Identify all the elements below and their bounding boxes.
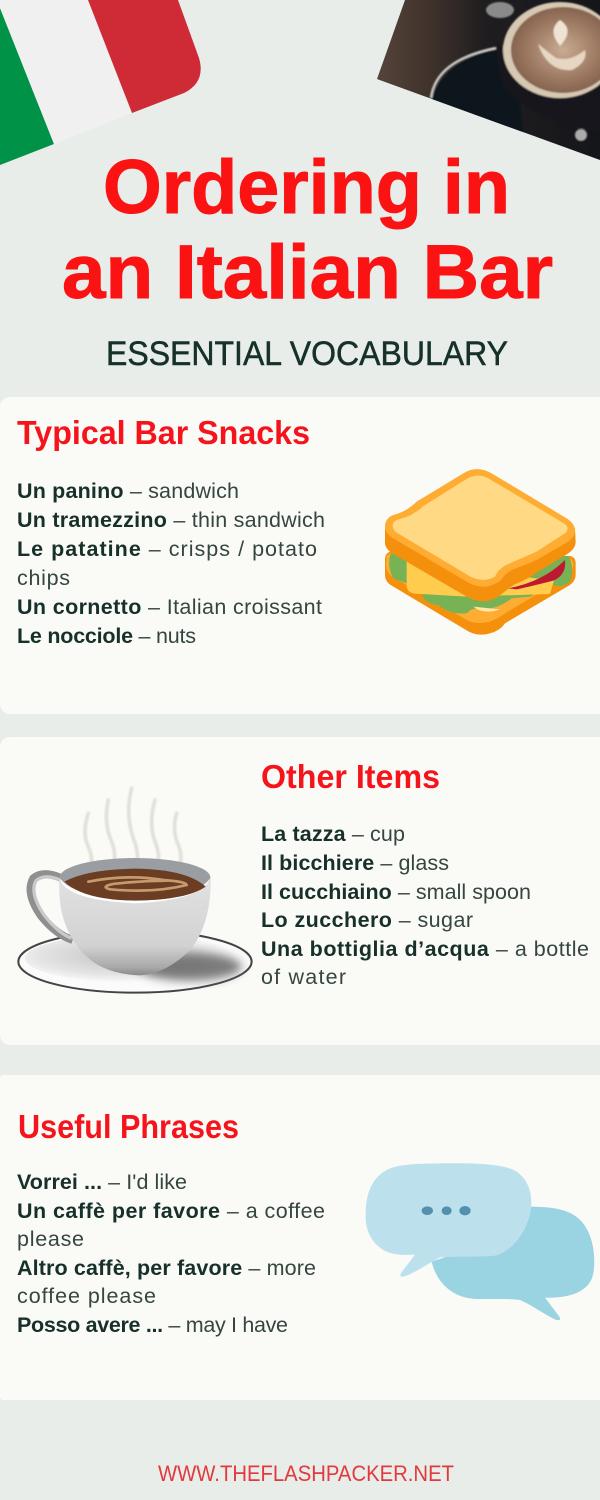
text block: items vocabulary: Lo zucchero – sugar (261, 908, 473, 932)
footer: website url: WWW.THEFLASHPACKER.NET (158, 1461, 454, 1486)
text block: phrases vocabulary: coffee please (17, 1284, 156, 1308)
panel: other items (0, 737, 600, 1045)
text block: phrases vocabulary: Altro caffè, per favore – more (17, 1256, 316, 1280)
text block: items vocabulary: Il bicchiere – glass (261, 851, 449, 875)
text block: snacks vocabulary: chips (17, 566, 70, 590)
text block: phrases vocabulary: Vorrei ... – I'd like (17, 1170, 187, 1194)
text block: snacks vocabulary: Le patatine – crisps / potato (17, 537, 317, 561)
panel: useful phrases (0, 1075, 600, 1400)
title: an Italian Bar (62, 230, 553, 315)
text block: snacks vocabulary: Un panino – sandwich (17, 479, 239, 503)
text block: items vocabulary (261, 822, 589, 989)
icon: Italian flag (0, 0, 201, 165)
text block: items vocabulary: of water (261, 965, 346, 989)
text block: phrases vocabulary: Posso avere ... – may I have (17, 1313, 288, 1337)
icon: speech bubbles (366, 1163, 594, 1320)
text block: snacks vocabulary: Un tramezzino – thin sandwich (17, 508, 325, 532)
text block: items vocabulary: La tazza – cup (261, 822, 405, 846)
heading: typical bar snacks: Typical Bar Snacks (17, 414, 310, 451)
text block: phrases vocabulary: Un caffè per favore – a coffee (17, 1199, 325, 1223)
title (62, 145, 553, 315)
text block: items vocabulary: Una bottiglia d’acqua – a bottle (261, 937, 589, 961)
text block: snacks vocabulary: Le nocciole – nuts (17, 624, 196, 648)
heading: useful phrases: Useful Phrases (18, 1108, 239, 1145)
panel: typical bar snacks (0, 397, 600, 714)
subtitle: ESSENTIAL VOCABULARY (106, 335, 508, 373)
icon: sandwich (385, 469, 576, 635)
text block: phrases vocabulary (17, 1170, 325, 1337)
text block: snacks vocabulary: Un cornetto – Italian croissant (17, 595, 322, 619)
heading: other items: Other Items (261, 758, 440, 795)
photo: cappuccino cup (370, 0, 600, 165)
icon: coffee cup on saucer (18, 788, 252, 993)
text block: snacks vocabulary (17, 479, 325, 648)
text block: phrases vocabulary: please (17, 1227, 84, 1251)
text block: items vocabulary: Il cucchiaino – small spoon (261, 880, 531, 904)
title: Ordering in (103, 145, 510, 230)
